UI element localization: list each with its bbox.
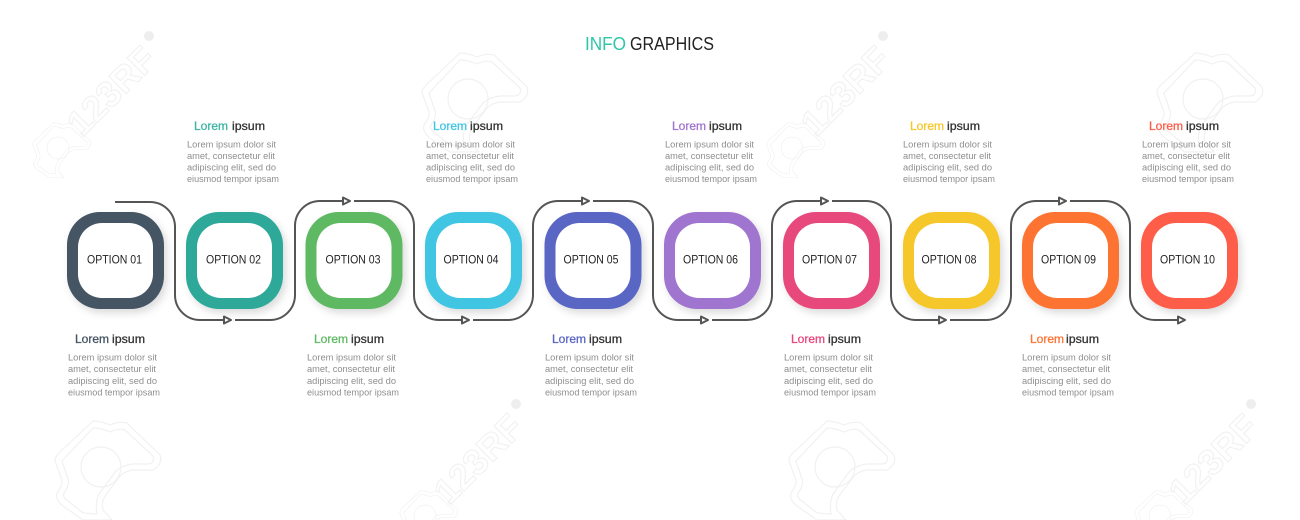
text block: option 07 bbox=[784, 332, 876, 398]
connector arrow: option 07 to 08 bbox=[832, 201, 946, 324]
title: GRAPHICS bbox=[630, 34, 714, 54]
watermark: 123RF logo top left bbox=[33, 31, 164, 177]
text block: option 02: Lorem bbox=[194, 119, 228, 133]
text block: option 06 bbox=[665, 119, 757, 184]
option 07 box: OPTION 07 bbox=[802, 254, 857, 266]
text block: option 09: ipsum bbox=[1066, 332, 1099, 346]
text block: option 02: eiusmod tempor ipsam bbox=[187, 174, 279, 184]
option 05 box bbox=[544, 212, 642, 309]
watermark: egg bottom left bbox=[55, 421, 161, 520]
text block: option 08: Lorem bbox=[910, 119, 944, 133]
text block: option 06: eiusmod tempor ipsam bbox=[665, 174, 757, 184]
text block: option 05: eiusmod tempor ipsam bbox=[545, 388, 637, 398]
watermark: 123RF logo bottom right bbox=[1135, 399, 1266, 520]
text block: option 03: Lorem bbox=[314, 332, 348, 346]
text block: option 05: Lorem ipsum dolor sit bbox=[545, 352, 635, 362]
option 08 box bbox=[903, 212, 1000, 309]
option 02 box: OPTION 02 bbox=[206, 254, 261, 266]
option 08 box: OPTION 08 bbox=[922, 254, 976, 266]
text block: option 02: adipiscing elit, sed do bbox=[187, 162, 276, 172]
text block: option 07: ipsum bbox=[828, 332, 861, 346]
text block: option 05: ipsum bbox=[589, 332, 622, 346]
watermark: 123RF logo bottom centre bbox=[400, 399, 531, 520]
text block: option 08: adipiscing elit, sed do bbox=[903, 162, 992, 172]
text block: option 03 bbox=[307, 332, 399, 398]
text block: option 04: Lorem ipsum dolor sit bbox=[426, 139, 516, 149]
text block: option 05: amet, consectetur elit bbox=[545, 364, 634, 374]
text block: option 10: adipiscing elit, sed do bbox=[1142, 162, 1231, 172]
connector arrow: option 03 to 04 bbox=[354, 201, 469, 324]
option 09 box: OPTION 09 bbox=[1041, 254, 1096, 266]
text block: option 03: amet, consectetur elit bbox=[307, 364, 396, 374]
text block: option 09: amet, consectetur elit bbox=[1022, 364, 1111, 374]
connector arrow: option 05 to 06 bbox=[593, 201, 708, 324]
text block: option 05: adipiscing elit, sed do bbox=[545, 376, 634, 386]
text block: option 02: amet, consectetur elit bbox=[187, 151, 276, 161]
text block: option 10: eiusmod tempor ipsam bbox=[1142, 174, 1234, 184]
text block: option 06: Lorem ipsum dolor sit bbox=[665, 139, 755, 149]
text block: option 08: Lorem ipsum dolor sit bbox=[903, 139, 993, 149]
text block: option 08: eiusmod tempor ipsam bbox=[903, 174, 995, 184]
connector arrow: option 01 to 02 bbox=[115, 202, 231, 324]
option 04 box: OPTION 04 bbox=[444, 254, 499, 266]
text block: option 09: Lorem bbox=[1030, 332, 1064, 346]
text block: option 04 bbox=[426, 119, 518, 184]
option 05 box: OPTION 05 bbox=[564, 254, 618, 266]
text block: option 01: amet, consectetur elit bbox=[68, 364, 157, 374]
option 03 box: OPTION 03 bbox=[326, 254, 380, 266]
text block: option 07: Lorem bbox=[791, 332, 825, 346]
text block: option 01 bbox=[68, 332, 160, 398]
text block: option 03: Lorem ipsum dolor sit bbox=[307, 352, 397, 362]
option 06 box: OPTION 06 bbox=[683, 254, 738, 266]
text block: option 09: eiusmod tempor ipsam bbox=[1022, 388, 1114, 398]
text block: option 08 bbox=[903, 119, 995, 184]
text block: option 01: Lorem ipsum dolor sit bbox=[68, 352, 158, 362]
option 03 box bbox=[306, 212, 402, 309]
option 09 box bbox=[1022, 212, 1119, 309]
text block: option 01: adipiscing elit, sed do bbox=[68, 376, 157, 386]
text block: option 07: adipiscing elit, sed do bbox=[784, 376, 873, 386]
text block: option 05 bbox=[545, 332, 637, 398]
watermark: egg bottom centre bbox=[789, 421, 895, 520]
text block: option 10: amet, consectetur elit bbox=[1142, 151, 1231, 161]
option 07 box bbox=[783, 212, 880, 309]
connector arrow: option 09 to 10 bbox=[1070, 201, 1185, 324]
text block: option 06: adipiscing elit, sed do bbox=[665, 162, 754, 172]
title: INFO bbox=[585, 34, 626, 54]
option 04 box bbox=[425, 212, 522, 309]
text block: option 04: eiusmod tempor ipsam bbox=[426, 174, 518, 184]
text block: option 02: ipsum bbox=[232, 119, 265, 133]
text block: option 04: adipiscing elit, sed do bbox=[426, 162, 515, 172]
connector arrow: option 02 to 03 bbox=[235, 198, 350, 320]
text block: option 10: ipsum bbox=[1186, 119, 1219, 133]
text block: option 10: Lorem ipsum dolor sit bbox=[1142, 139, 1232, 149]
text block: option 03: eiusmod tempor ipsam bbox=[307, 388, 399, 398]
text block: option 04: ipsum bbox=[470, 119, 503, 133]
watermark: egg top bbox=[422, 53, 528, 152]
text block: option 01: Lorem bbox=[75, 332, 109, 346]
text block: option 04: Lorem bbox=[433, 119, 467, 133]
text block: option 02 bbox=[187, 119, 279, 184]
connector arrow: option 08 to 09 bbox=[950, 198, 1066, 320]
text block: option 03: adipiscing elit, sed do bbox=[307, 376, 396, 386]
text block: option 09 bbox=[1022, 332, 1114, 398]
connector arrow: option 06 to 07 bbox=[712, 198, 828, 320]
title bbox=[585, 34, 714, 54]
text block: option 08: ipsum bbox=[947, 119, 980, 133]
option 01 box bbox=[67, 212, 164, 309]
text block: option 06: ipsum bbox=[709, 119, 742, 133]
connector arrow: option 04 to 05 bbox=[473, 198, 589, 320]
text block: option 08: amet, consectetur elit bbox=[903, 151, 992, 161]
text block: option 05: Lorem bbox=[552, 332, 586, 346]
text block: option 10: Lorem bbox=[1149, 119, 1183, 133]
option 10 box: OPTION 10 bbox=[1160, 254, 1215, 266]
option 10 box bbox=[1141, 212, 1238, 309]
option 01 box: OPTION 01 bbox=[87, 254, 142, 266]
text block: option 06: Lorem bbox=[672, 119, 706, 133]
text block: option 06: amet, consectetur elit bbox=[665, 151, 754, 161]
text block: option 02: Lorem ipsum dolor sit bbox=[187, 139, 277, 149]
text block: option 07: amet, consectetur elit bbox=[784, 364, 873, 374]
text block: option 10 bbox=[1142, 119, 1234, 184]
text block: option 07: eiusmod tempor ipsam bbox=[784, 388, 876, 398]
text block: option 01: eiusmod tempor ipsam bbox=[68, 388, 160, 398]
option 02 box bbox=[186, 212, 283, 309]
text block: option 09: adipiscing elit, sed do bbox=[1022, 376, 1111, 386]
text block: option 01: ipsum bbox=[112, 332, 145, 346]
text block: option 04: amet, consectetur elit bbox=[426, 151, 515, 161]
option 06 box bbox=[664, 212, 761, 309]
text block: option 09: Lorem ipsum dolor sit bbox=[1022, 352, 1112, 362]
watermark: egg top right bbox=[1157, 53, 1263, 152]
watermark: 123RF logo top centre bbox=[767, 31, 898, 177]
text block: option 03: ipsum bbox=[351, 332, 384, 346]
text block: option 07: Lorem ipsum dolor sit bbox=[784, 352, 874, 362]
